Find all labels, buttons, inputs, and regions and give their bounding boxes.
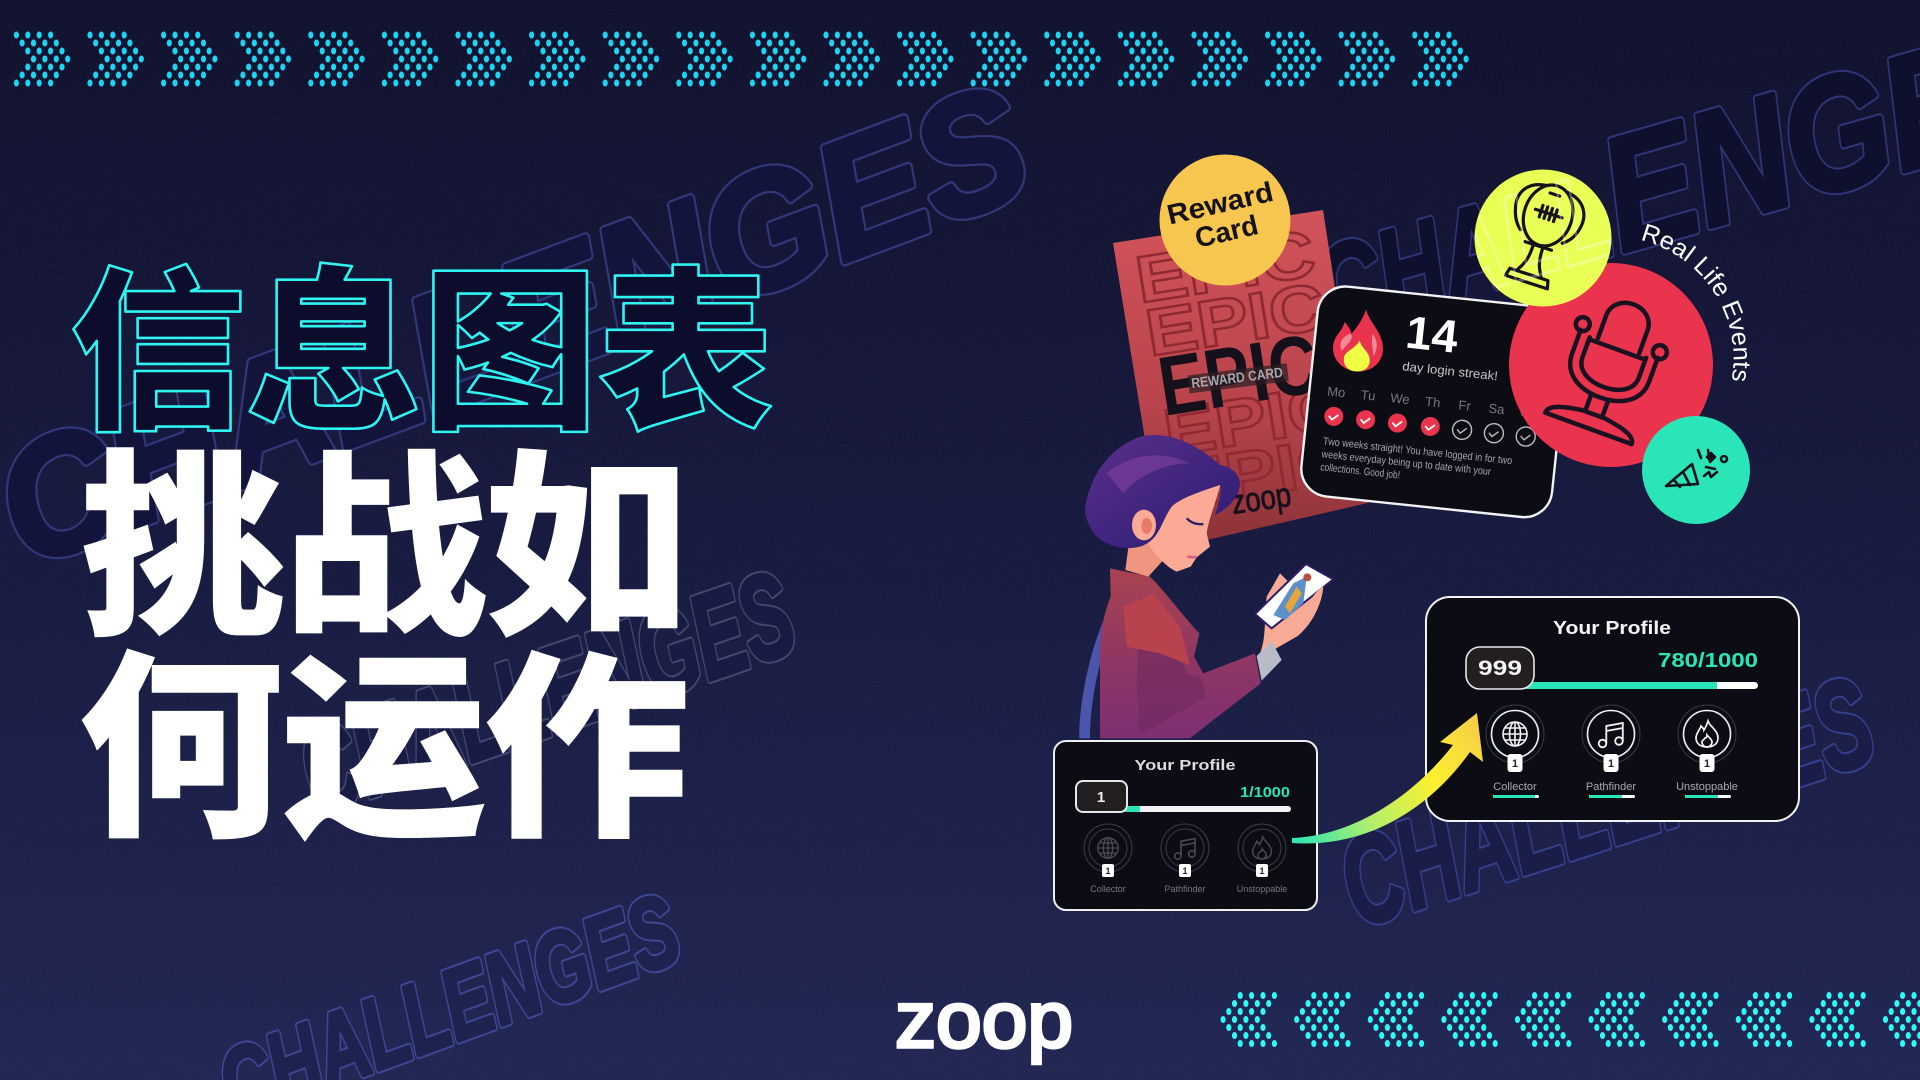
pack: zoop logo: zoop — [1229, 476, 1294, 522]
achievement: unstoppable — [1676, 705, 1738, 798]
achievement: unstoppable: Unstoppable — [1237, 884, 1287, 894]
title: white heading line one: 挑战如 — [80, 438, 686, 661]
bottom row of dotted chevrons — [1220, 992, 1920, 1047]
week day labels: Su — [1520, 404, 1537, 420]
achievement: collector: 1 — [1105, 866, 1111, 876]
achievement: pathfinder: 1 — [1182, 866, 1188, 876]
streak description: collections. Good job! — [1320, 461, 1401, 482]
watermark: large challenges outline: CHALLENGES — [0, 50, 1051, 601]
level badge: 1 — [1097, 789, 1105, 806]
top row of dotted chevrons — [14, 32, 1469, 86]
reward card pack: EPIC — [1141, 269, 1330, 370]
watermark: upper right challenges outline: CHALL — [1300, 147, 1626, 360]
week day labels: Th — [1424, 394, 1441, 410]
reward card pack — [1113, 210, 1368, 545]
icon: flame — [1331, 306, 1387, 374]
watermark: large challenges outline: CHALLENGES — [0, 50, 1051, 601]
week day checks: done — [1323, 406, 1441, 437]
level badge: 999 — [1478, 657, 1522, 680]
title: outlined heading: 信息图表 — [70, 257, 774, 453]
week day labels: Tu — [1360, 387, 1376, 404]
reward card pack: EPIC — [1159, 369, 1348, 470]
badge: teal circle with party popper — [1642, 416, 1750, 524]
neck — [1125, 537, 1163, 577]
title: white heading line two: 何运作 — [78, 640, 687, 863]
achievement: unstoppable: 1 — [1259, 866, 1265, 876]
ear — [1132, 510, 1156, 540]
icon: party popper — [1666, 450, 1727, 487]
card title: Your Profile — [1134, 757, 1236, 774]
achievement: collector: Collector — [1493, 781, 1537, 793]
progress value: 1/1000 — [1240, 784, 1290, 801]
progress value: 780/1000 — [1658, 650, 1758, 672]
week day labels: Fr — [1458, 397, 1472, 414]
icon: microphone — [1543, 288, 1679, 445]
progress bar — [1120, 806, 1291, 812]
achievement: pathfinder: Pathfinder — [1586, 781, 1636, 793]
streak description — [1319, 435, 1513, 493]
achievement: pathfinder: Pathfinder — [1164, 884, 1206, 894]
badge: reward card — [1160, 154, 1290, 286]
achievement: collector — [1486, 705, 1544, 798]
badge: reward card: Reward — [1164, 176, 1276, 230]
level badge — [1466, 647, 1534, 689]
sleeve cuff — [1257, 641, 1282, 681]
panel: small profile card — [1054, 741, 1317, 910]
streak description: weeks everyday being up to date with your — [1320, 448, 1492, 478]
watermark: middle challenges outline: CHALLENGES — [283, 546, 811, 840]
icon: football trophy — [1494, 175, 1591, 293]
achievement: unstoppable: 1 — [1704, 758, 1710, 770]
pack: big EPIC: EPIC — [1152, 316, 1325, 434]
hand and phone — [1260, 573, 1323, 653]
achievement: collector: Collector — [1090, 884, 1126, 894]
watermark: upper right challenges outline — [1300, 0, 1920, 360]
watermark: bottom challenges outline — [222, 894, 680, 1080]
achievement: collector: 1 — [1512, 758, 1518, 770]
watermark: middle challenges outline — [283, 546, 811, 840]
achievement: pathfinder — [1161, 824, 1209, 894]
hair — [1085, 435, 1240, 548]
achievement: pathfinder: 1 — [1608, 758, 1614, 770]
label: real life events curved text: Real Life Events — [1642, 224, 1750, 381]
strap — [1079, 589, 1157, 738]
reward card pack: EPIC — [1131, 216, 1320, 317]
watermark: upper right challenges outline: CHALL — [1300, 147, 1626, 360]
badge: red circle with microphone — [1509, 263, 1713, 467]
panel: large profile card — [1426, 597, 1799, 821]
achievement: collector — [1084, 824, 1132, 894]
card title: Your Profile — [1553, 617, 1671, 638]
reward card pack: EPIC — [1169, 421, 1358, 522]
watermark lines over yellow circle: CHALL — [1300, 147, 1626, 360]
week day checks: pending — [1452, 419, 1536, 447]
achievement: pathfinder — [1582, 705, 1640, 798]
illustration: woman with phone — [1079, 435, 1333, 738]
week day labels — [1327, 384, 1537, 420]
streak number: 14 — [1403, 306, 1461, 363]
panel: login streak card — [1299, 284, 1571, 520]
week day labels: We — [1390, 390, 1410, 407]
level badge — [1076, 781, 1127, 812]
achievement: unstoppable: Unstoppable — [1676, 781, 1738, 793]
logo: zoop: zoop — [895, 975, 1073, 1064]
watermark: middle challenges outline: CHALLENGES — [283, 546, 811, 840]
streak description: Two weeks straight! You have logged in for two — [1322, 435, 1513, 467]
badge: yellow circle with football trophy — [1474, 170, 1612, 306]
progress bar — [1520, 682, 1758, 689]
arrow: progress from small to large card — [1292, 713, 1483, 843]
badge: reward card: Card — [1192, 209, 1261, 254]
streak caption: day login streak! — [1402, 359, 1499, 383]
achievement: unstoppable — [1237, 824, 1287, 894]
week day labels: Sa — [1488, 401, 1506, 417]
coat — [1100, 568, 1261, 738]
face — [1145, 483, 1221, 572]
week day labels: Mo — [1327, 384, 1346, 400]
pack: reward card label: REWARD CARD — [1190, 364, 1284, 391]
